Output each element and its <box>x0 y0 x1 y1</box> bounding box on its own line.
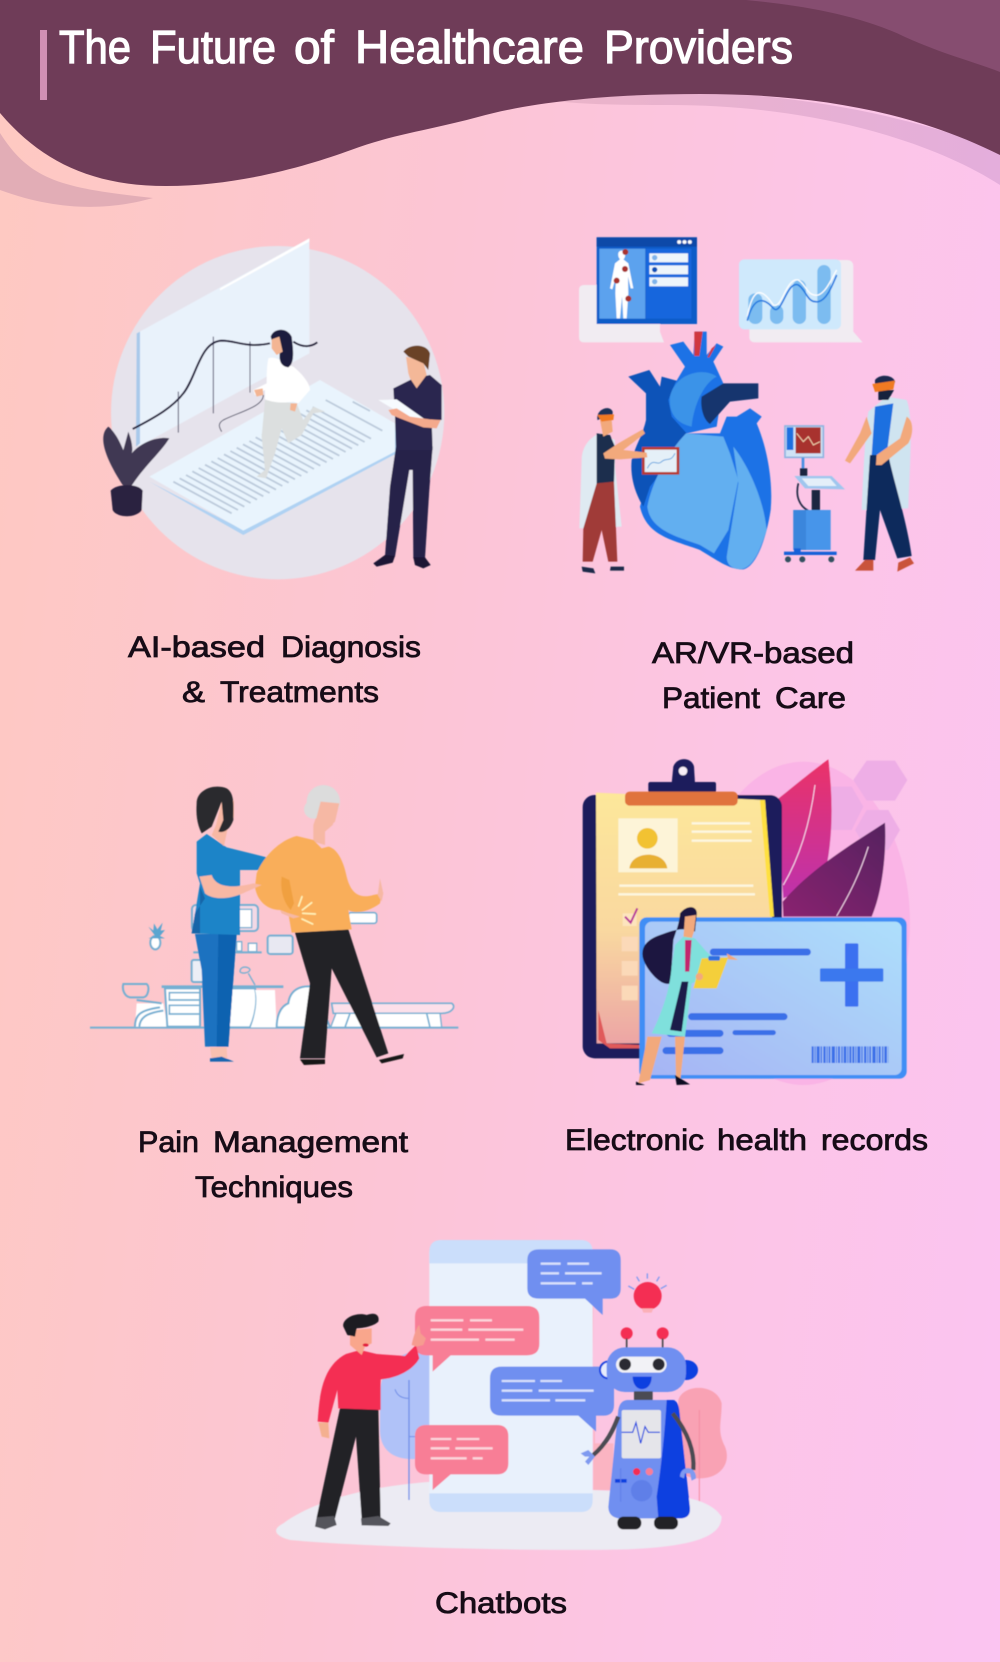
label: Management <box>213 1126 409 1159</box>
title: Future <box>150 21 276 73</box>
panel: AI-based diagnosis <box>103 238 444 709</box>
label: Treatments <box>220 676 379 709</box>
illustration: holographic heart <box>579 237 914 573</box>
label <box>138 1126 409 1204</box>
title: Providers <box>604 21 793 73</box>
label: Pain <box>138 1126 199 1159</box>
label: & <box>182 676 205 709</box>
panel: chatbots <box>276 1240 727 1620</box>
label: AR/VR-based <box>652 637 854 670</box>
label: Diagnosis <box>281 631 421 664</box>
label: Care <box>775 682 846 715</box>
label: Patient <box>662 682 761 715</box>
title: The <box>59 21 131 73</box>
label: Chatbots <box>435 1587 567 1620</box>
label <box>128 631 421 709</box>
illustration: treadmill diagnosis <box>103 238 444 579</box>
label: health <box>717 1124 807 1157</box>
label: Electronic <box>565 1124 704 1157</box>
label: AI-based <box>128 631 265 664</box>
label <box>652 637 854 715</box>
panel: electronic health records <box>565 759 928 1157</box>
header wave banner <box>0 0 1000 207</box>
title: Healthcare <box>355 21 584 73</box>
title accent bar <box>40 30 47 100</box>
label: records <box>821 1124 928 1157</box>
illustration: man and robot chatting <box>276 1240 727 1550</box>
panel: pain management <box>90 785 458 1204</box>
title: of <box>294 21 334 73</box>
illustration: nurse and patient <box>90 785 458 1065</box>
label: Techniques <box>195 1171 353 1204</box>
panel: AR/VR patient care <box>579 237 914 715</box>
illustration: clipboard and health card <box>583 759 910 1085</box>
